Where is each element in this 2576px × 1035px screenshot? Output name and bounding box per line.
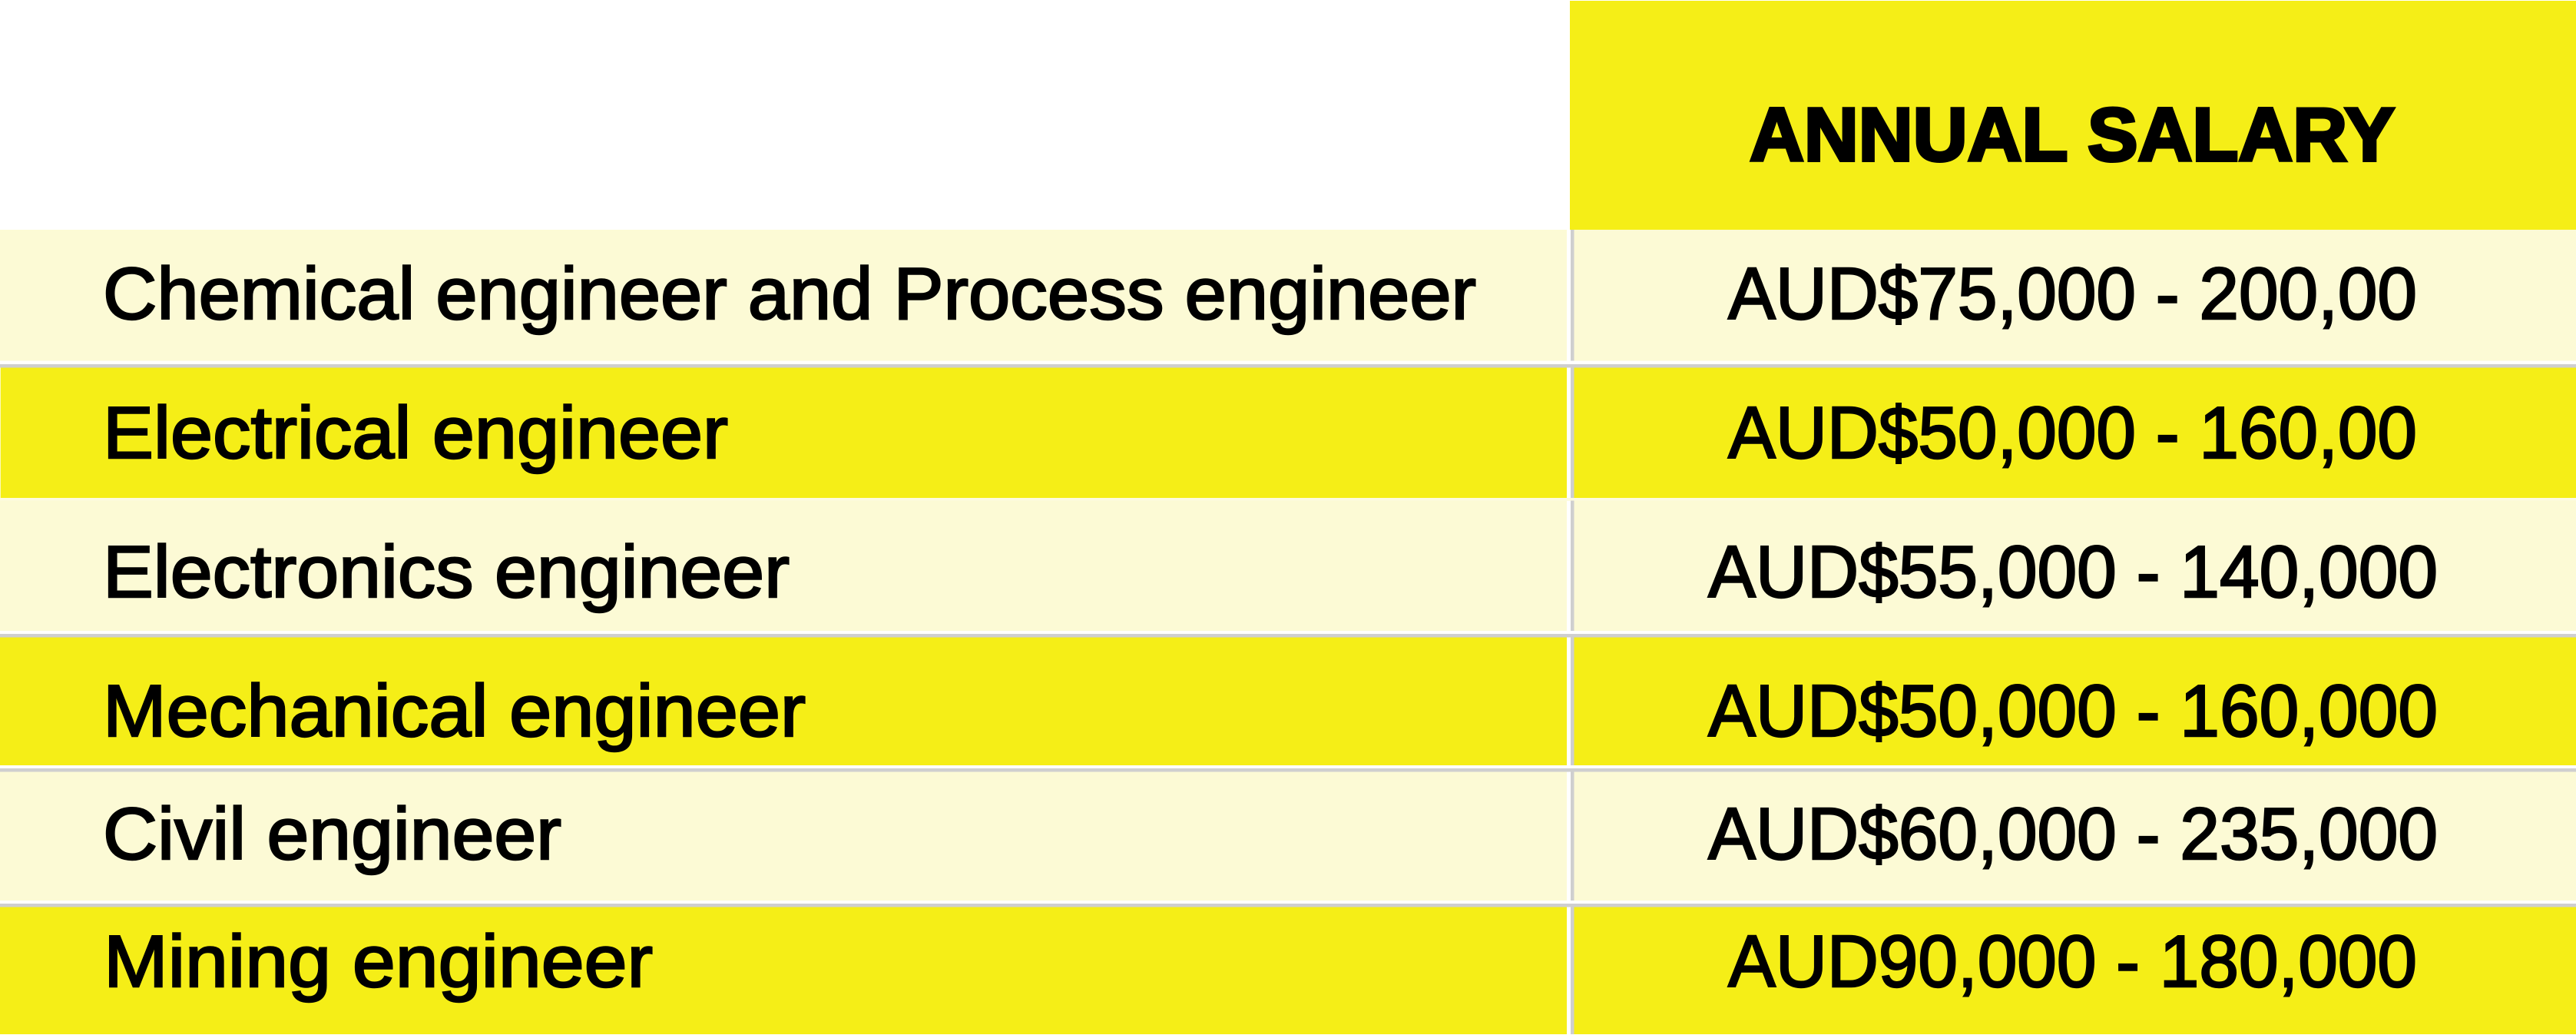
table header: annual salary: [1570, 1, 2576, 230]
row: mechanical engineer: AUD$50,000 - 160,000: [1708, 670, 2438, 752]
row: electronics engineer: [0, 498, 2576, 631]
row: chemical engineer and process engineer: [0, 230, 2576, 361]
row: electrical engineer: AUD$50,000 - 160,00: [1728, 392, 2417, 474]
table header: annual salary: ANNUAL SALARY: [1750, 92, 2395, 177]
row: civil engineer: Civil engineer: [103, 793, 561, 875]
row: mechanical engineer: [0, 638, 2576, 765]
row divider: [0, 768, 2576, 771]
row: chemical engineer and process engineer: Chemical engineer and Process engineer: [103, 253, 1476, 335]
row: electronics engineer: AUD$55,000 - 140,000: [1708, 531, 2438, 613]
row: electrical engineer: [1, 367, 2576, 498]
row: electrical engineer: Electrical engineer: [103, 392, 728, 474]
row: mining engineer: Mining engineer: [104, 921, 653, 1003]
row: electronics engineer: Electronics engineer: [103, 531, 790, 613]
row divider: [0, 904, 2576, 907]
row divider: [0, 634, 2576, 638]
row: mining engineer: [0, 907, 2576, 1034]
row: civil engineer: AUD$60,000 - 235,000: [1708, 793, 2438, 875]
row: mechanical engineer: Mechanical engineer: [103, 670, 806, 752]
row: civil engineer: [0, 771, 2576, 901]
row: mining engineer: AUD90,000 - 180,000: [1728, 921, 2417, 1003]
row: chemical engineer and process engineer: AUD$75,000 - 200,00: [1728, 253, 2417, 335]
row divider: [0, 364, 2576, 367]
